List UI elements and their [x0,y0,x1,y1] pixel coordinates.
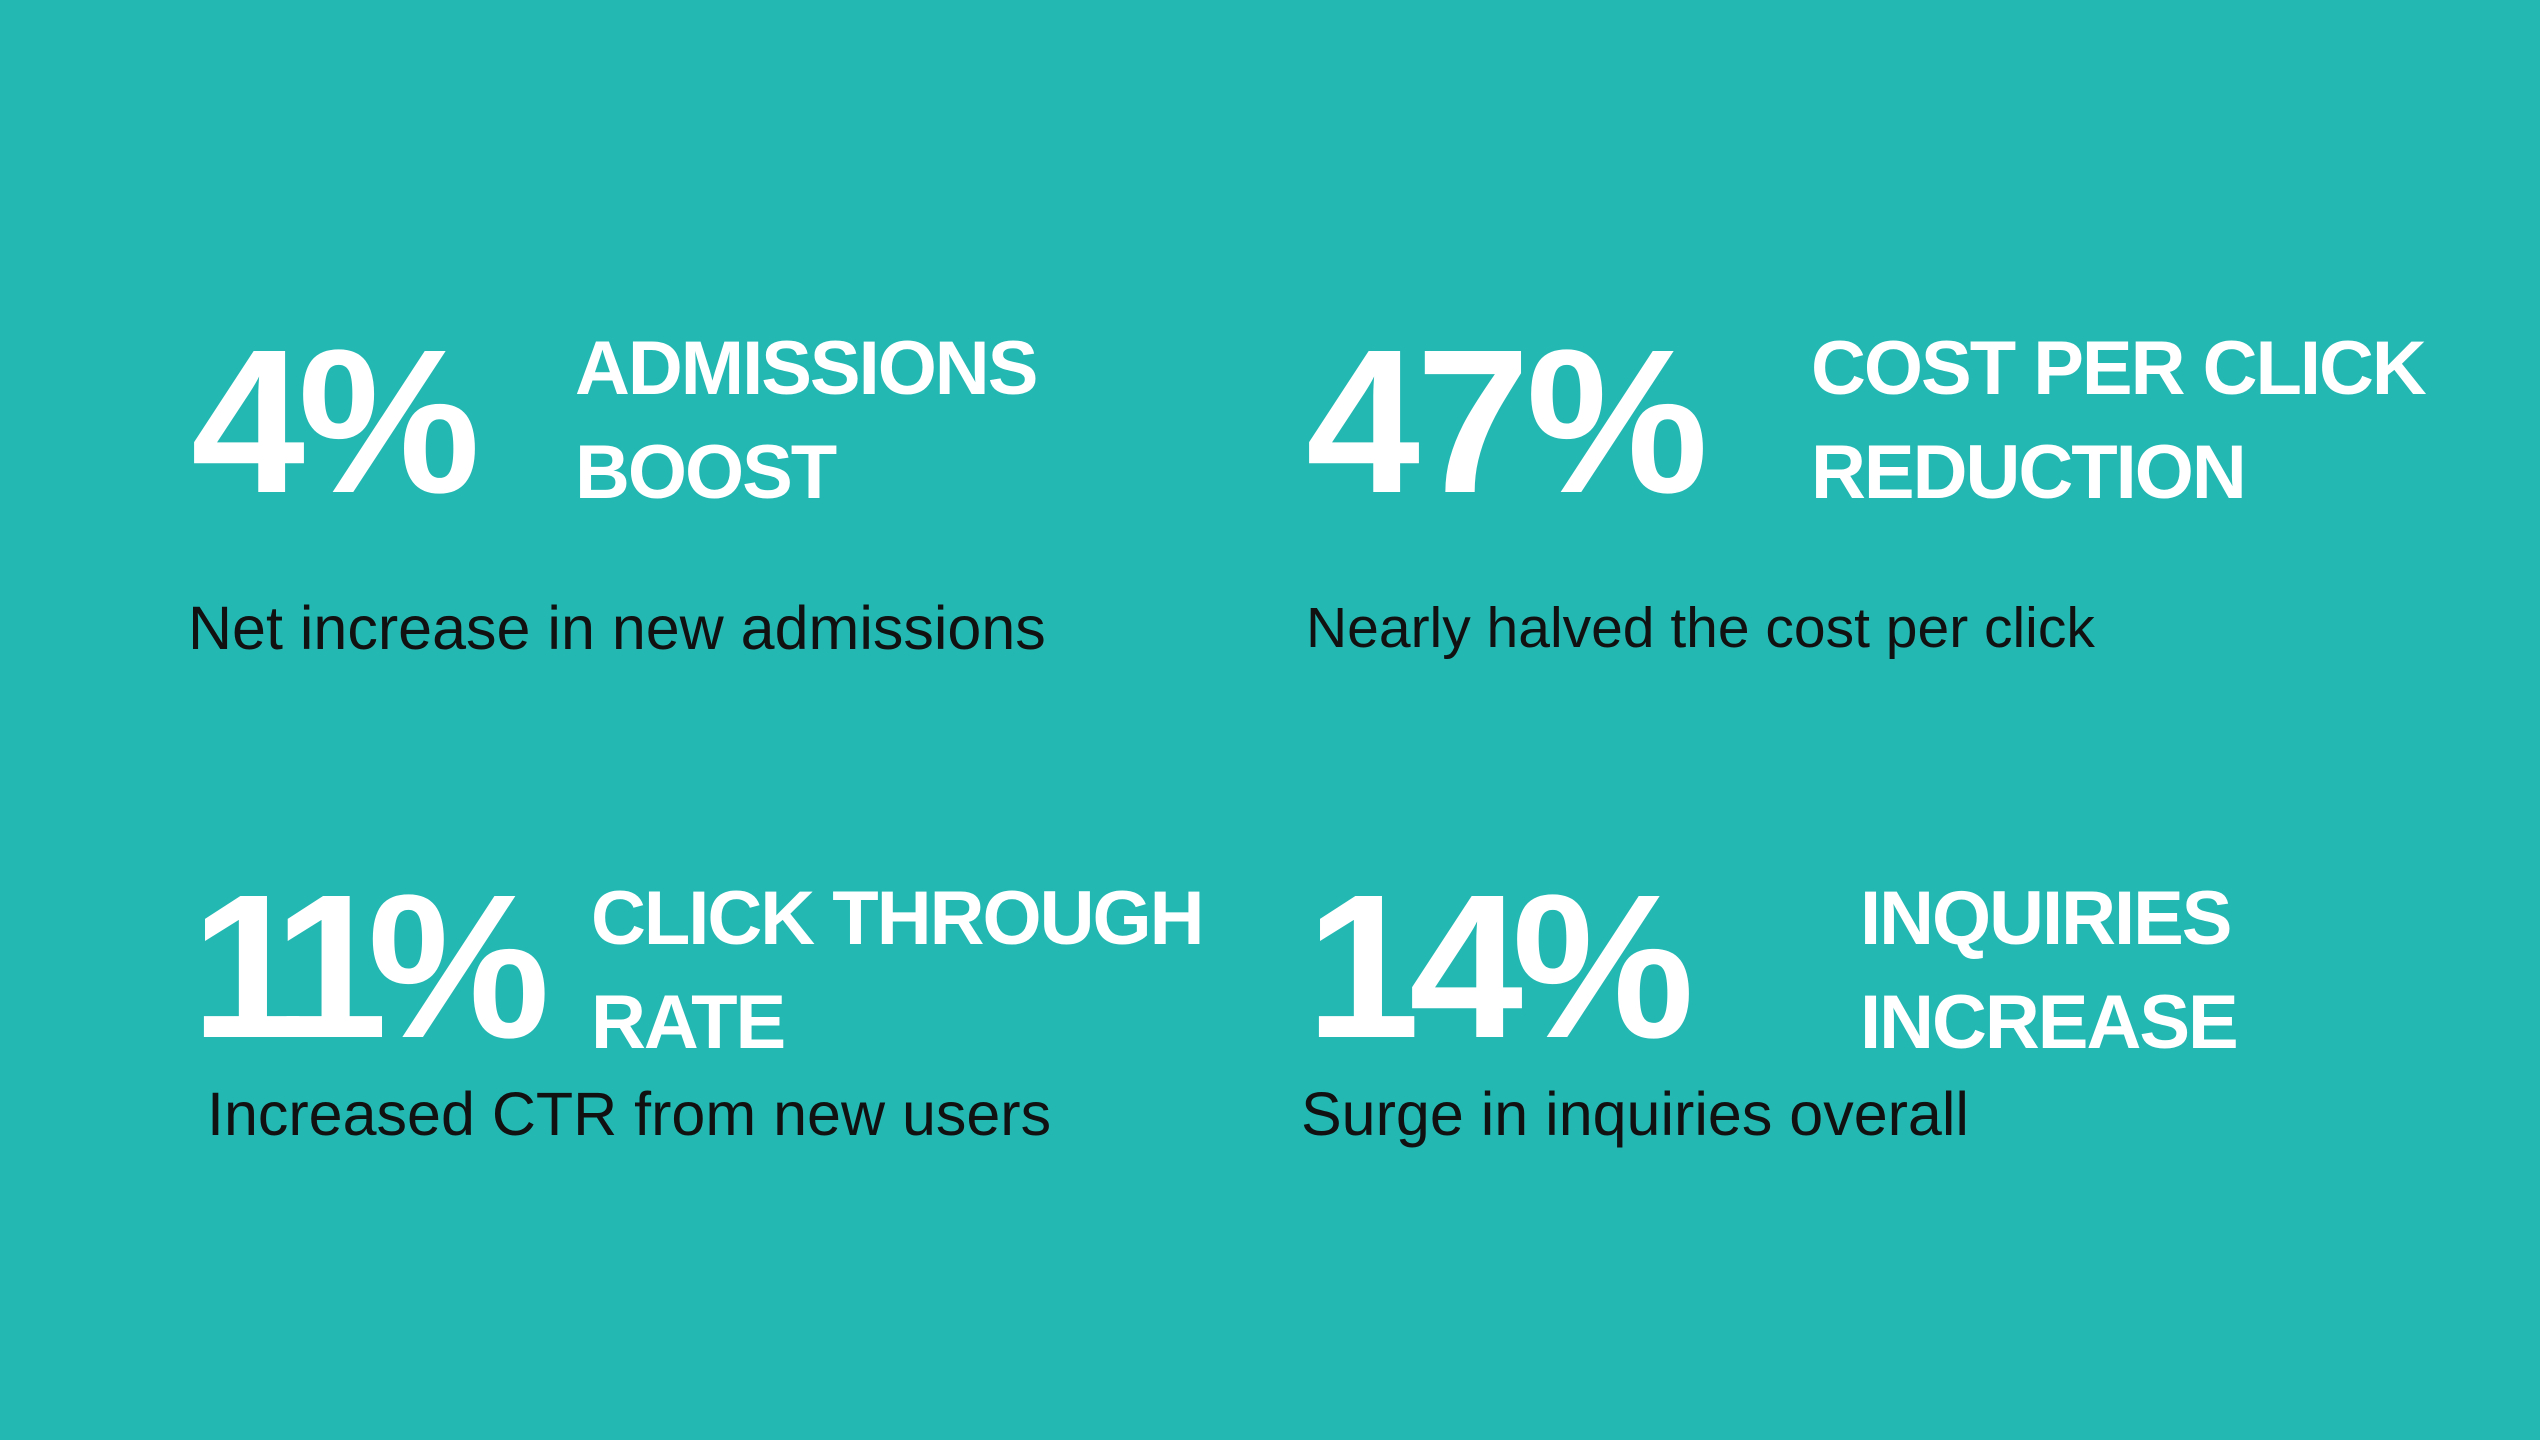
label: admissions boost: ADMISSIONS [575,326,1036,411]
label: admissions boost [575,326,1036,515]
label: admissions boost: BOOST [575,430,835,515]
panel: cost per click [1306,307,2426,660]
label: click through rate: RATE [591,980,784,1065]
description: cost per click: Nearly halved the cost per click [1306,596,2095,660]
label: click through rate: CLICK THROUGH [591,876,1203,961]
label: cost per click reduction: COST PER CLICK [1811,326,2425,411]
panel: admissions [188,307,1046,662]
label: inquiries increase: INQUIRIES [1860,876,2230,961]
stat number: 47%: 47% [1306,307,1704,536]
panel: click through rate [191,852,1203,1148]
stat number: 11%: 11% [191,852,530,1081]
label: inquiries increase [1860,876,2237,1065]
description: CTR: Increased CTR from new users [207,1080,1051,1148]
description: admissions: Net increase in new admissions [188,594,1046,662]
label: inquiries increase: INCREASE [1860,980,2237,1065]
stat number: 4%: 4% [191,307,473,536]
label: click through rate [591,876,1203,1065]
label: cost per click reduction [1811,326,2426,515]
description: inquiries: Surge in inquiries overall [1301,1080,1969,1148]
stat number: 14%: 14% [1306,852,1683,1081]
label: cost per click reduction: REDUCTION [1811,430,2245,515]
panel: inquiries [1301,852,2237,1148]
